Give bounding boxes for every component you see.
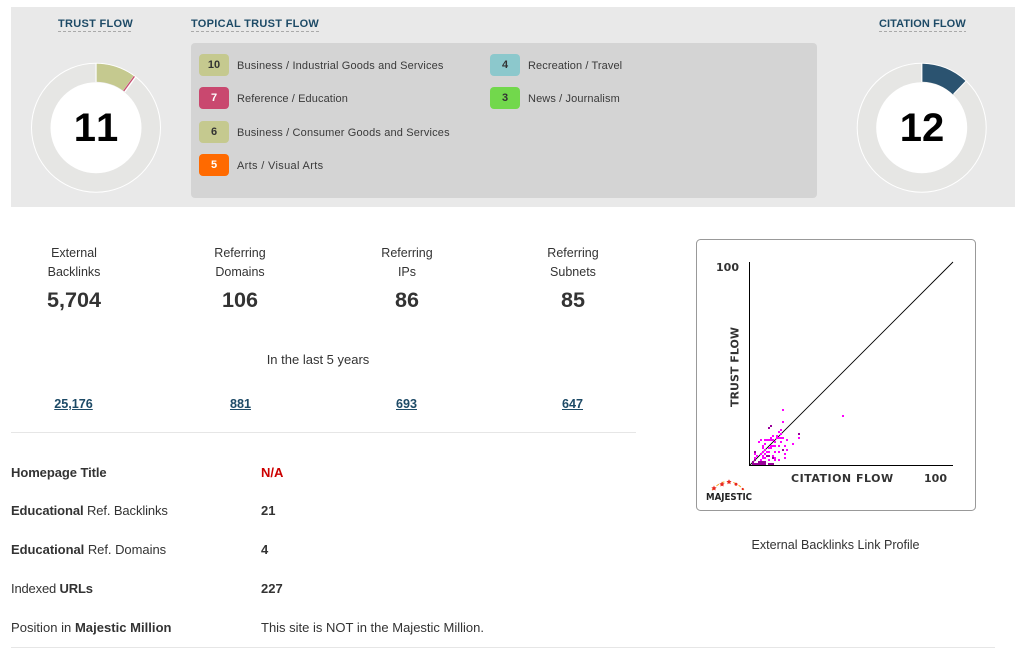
stat: external backlinks: External (51, 246, 97, 260)
chart: citation flow donut (856, 62, 987, 193)
row: majestic million position: Position in Majestic Million (11, 620, 172, 635)
row: homepage title (11, 465, 283, 480)
stat: referring IPs: 86 (395, 286, 419, 312)
row: indexed urls: 227 (261, 581, 283, 596)
link: 25,176: 25,176 (54, 397, 93, 411)
panel: top summary band (11, 7, 1015, 207)
badge: 5: 5 (211, 159, 217, 171)
badge: 3: 3 (502, 92, 508, 104)
metric: trust flow score: 11 (74, 106, 118, 150)
stat: referring domains: Referring (214, 246, 266, 260)
label: News / Journalism: News / Journalism (528, 93, 620, 105)
axis label: citation flow: CITATION FLOW (791, 472, 894, 485)
metric: citation flow score: 12 (900, 106, 944, 150)
panel: topical trust flow categories (191, 43, 817, 198)
stat: referring domains: 106 (222, 286, 258, 312)
row: educational backlinks: 21 (261, 503, 275, 518)
label: Business / Consumer Goods and Services: Business / Consumer Goods and Services (237, 127, 450, 139)
link: 647: 647 (562, 397, 583, 411)
logo: majestic (706, 479, 752, 503)
badge: 5 (199, 154, 229, 176)
heading: topical trust flow: TOPICAL TRUST FLOW (191, 18, 319, 30)
link: 693: 693 (396, 397, 417, 411)
row: indexed urls (11, 581, 283, 596)
stat: external backlinks: 5,704 (47, 286, 101, 312)
badge: 6 (199, 121, 229, 143)
label: Recreation / Travel: Recreation / Travel (528, 60, 622, 72)
stat: referring subnets (547, 246, 599, 312)
row: homepage title: Homepage Title (11, 465, 107, 480)
row: majestic million position (11, 620, 484, 635)
link: 881: 881 (230, 397, 251, 411)
logo: majestic: MAJESTIC (706, 492, 752, 503)
text: in the last 5 years: In the last 5 years (267, 352, 369, 367)
row: educational backlinks (11, 503, 276, 518)
row: educational domains: Educational Ref. Domains (11, 542, 166, 557)
badge: 10 (199, 54, 229, 76)
row: indexed urls: Indexed URLs (11, 581, 93, 596)
badge: 3 (490, 87, 520, 109)
stat: referring IPs: Referring (381, 246, 433, 260)
heading: trust flow: TRUST FLOW (58, 18, 133, 30)
row: educational backlinks: Educational Ref. Backlinks (11, 503, 168, 518)
row: educational domains: 4 (261, 542, 268, 557)
axis label: citation flow 100: 100 (924, 472, 947, 485)
badge: 10: 10 (208, 59, 220, 71)
stat: external backlinks: Backlinks (48, 265, 100, 279)
axis label: trust flow: TRUST FLOW (728, 327, 742, 407)
chart: external backlinks link profile scatter (696, 239, 976, 511)
chart: trust flow donut (31, 62, 161, 193)
heading: citation flow: CITATION FLOW (879, 18, 966, 30)
stat: referring IPs (381, 246, 433, 312)
label: Reference / Education: Reference / Education (237, 93, 348, 105)
stat: referring subnets: Subnets (550, 265, 596, 279)
badge: 7: 7 (211, 92, 217, 104)
label: Arts / Visual Arts: Arts / Visual Arts (237, 160, 323, 172)
stat: referring IPs: IPs (398, 265, 416, 279)
stat: external backlinks (47, 246, 101, 312)
caption: chart title: External Backlinks Link Profile (751, 538, 920, 552)
row: homepage title: N/A (261, 465, 283, 480)
label: Business / Industrial Goods and Services: Business / Industrial Goods and Services (237, 60, 444, 72)
stat: referring domains: Domains (215, 265, 265, 279)
badge: 4 (490, 54, 520, 76)
badge: 4: 4 (502, 59, 508, 71)
row: majestic million position: This site is NOT in the Majestic Million. (261, 620, 484, 635)
badge: 6: 6 (211, 126, 217, 138)
row: educational domains (11, 542, 268, 557)
scatter points (752, 409, 844, 465)
axis label: trust flow 100: 100 (716, 261, 739, 274)
badge: 7 (199, 87, 229, 109)
stat: referring subnets: Referring (547, 246, 599, 260)
stat: referring subnets: 85 (561, 286, 585, 312)
stat: referring domains (214, 246, 266, 312)
